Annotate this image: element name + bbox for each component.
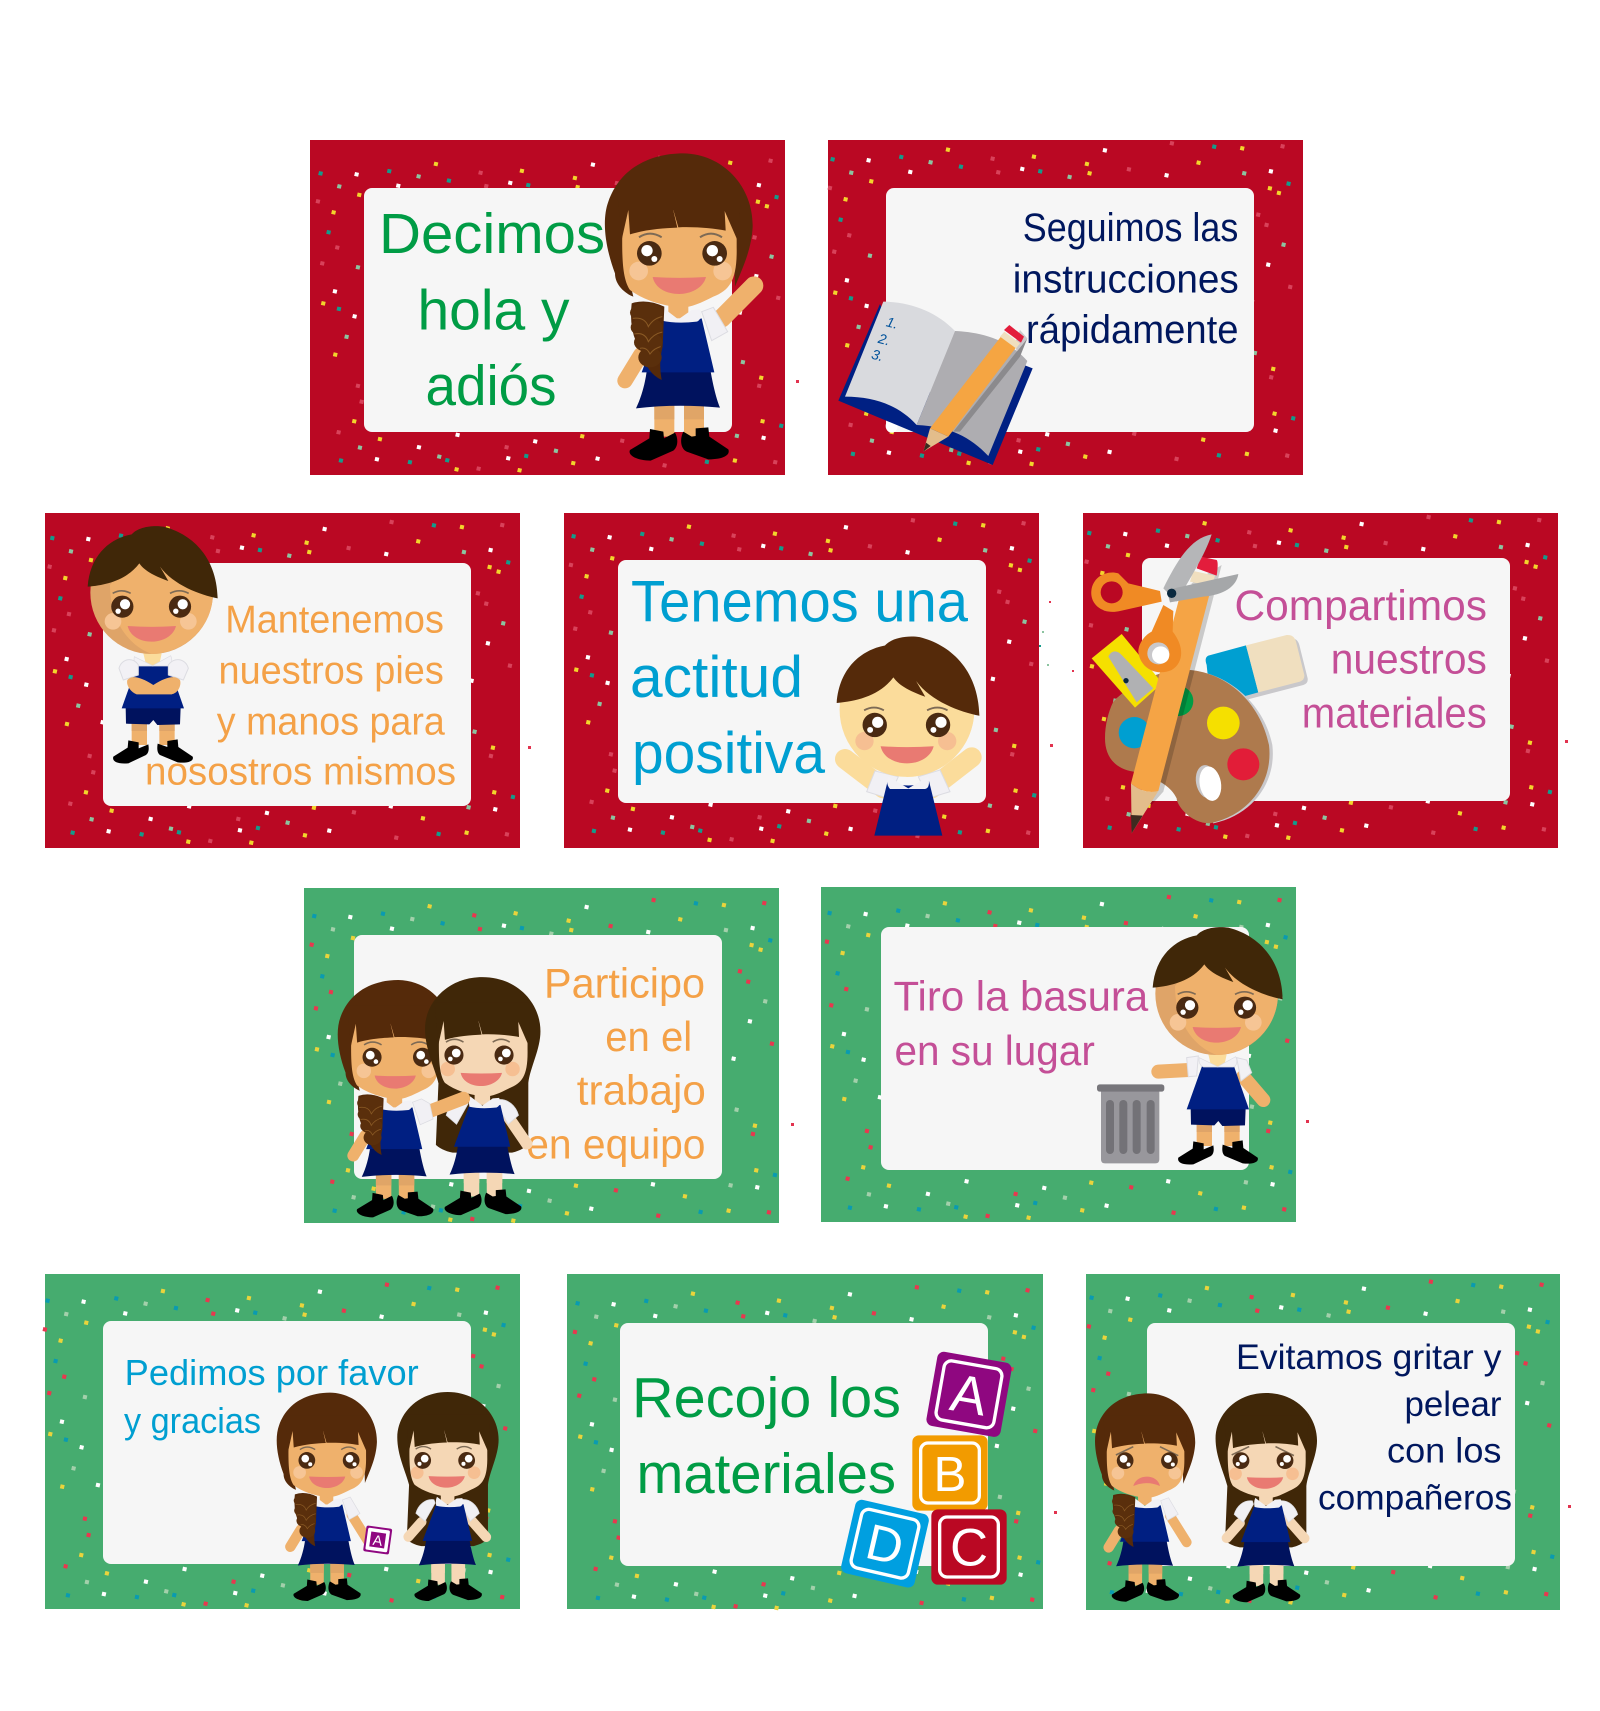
character: boy throwing trash — [1153, 927, 1283, 1165]
text: Tiro la basura en su lugar: en su lugar — [894, 1027, 1095, 1074]
text: Compartimos nuestros materiales: nuestros — [1331, 636, 1487, 684]
character: girl with long hair — [397, 1392, 499, 1601]
icon: paint palette — [1105, 670, 1273, 823]
stray confetti specks — [44, 380, 1571, 1514]
icon: trash can — [1097, 1084, 1164, 1163]
text: Participo en el trabajo en equipo: trabajo — [577, 1066, 706, 1113]
text: Mantenemos nuestros pies y manos para nosostros mismos: nuestros pies — [218, 650, 444, 693]
panel: Pedimos por favor y gracias — [43, 1274, 520, 1609]
panel: Recojo los materiales — [567, 1274, 1043, 1610]
icon: eraser — [1206, 635, 1308, 707]
character: sad girl with braid — [1095, 1393, 1195, 1602]
text: Compartimos nuestros materiales: Compartimos — [1234, 582, 1487, 630]
panel: Decimos hola y adiós — [310, 140, 785, 475]
text: Evitamos gritar y pelear con los compañeros — [1236, 1338, 1512, 1517]
icon: open book and pencil: 2. — [876, 330, 892, 349]
text: Pedimos por favor y gracias: Pedimos por favor — [125, 1352, 419, 1393]
text: Decimos hola y adiós — [379, 202, 605, 418]
icon: open book and pencil: 3. — [870, 346, 885, 364]
panel: Participo en el trabajo en equipo — [304, 888, 779, 1223]
text: Mantenemos nuestros pies y manos para nosostros mismos — [145, 599, 456, 794]
text: Mantenemos nuestros pies y manos para nosostros mismos: Mantenemos — [225, 599, 444, 642]
character: girl waving — [605, 153, 754, 461]
character: arm on shoulder — [412, 1098, 463, 1125]
text: Evitamos gritar y pelear con los compañeros: compañeros — [1318, 1478, 1512, 1517]
character: girl with braid holding block — [277, 1393, 377, 1601]
text: Participo en el trabajo en equipo — [526, 960, 706, 1167]
character: girl with long hair — [425, 977, 540, 1215]
text: Pedimos por favor y gracias — [124, 1352, 419, 1441]
character: worried girl with long hair — [1216, 1393, 1317, 1602]
text: Pedimos por favor y gracias: y gracias — [124, 1400, 261, 1441]
text: Tenemos una actitud positiva: actitud — [630, 645, 803, 710]
icon: block B — [912, 1435, 988, 1511]
text: Recojo los materiales: materiales — [636, 1442, 896, 1506]
text: Tiro la basura en su lugar — [894, 972, 1149, 1074]
text: Mantenemos nuestros pies y manos para nosostros mismos: nosostros mismos — [145, 751, 456, 794]
text: Tenemos una actitud positiva — [630, 570, 969, 786]
panel: Tenemos una actitud positiva — [564, 513, 1039, 848]
icon: block C — [931, 1509, 1007, 1585]
text: Participo en el trabajo en equipo: en el — [605, 1013, 692, 1060]
icon: open book and pencil: 1. — [885, 313, 900, 332]
icon: block D: D — [861, 1513, 909, 1576]
text: Decimos hola y adiós: hola y — [418, 278, 570, 342]
text: Evitamos gritar y pelear con los compañeros: con los — [1387, 1432, 1502, 1471]
text: Tiro la basura en su lugar: Tiro la basura — [894, 972, 1149, 1019]
panel: Compartimos nuestros materiales — [1083, 513, 1558, 848]
text: Decimos hola y adiós: adiós — [426, 354, 556, 418]
icon: small block A: A — [372, 1533, 384, 1550]
text: Compartimos nuestros materiales — [1234, 582, 1487, 738]
text: Recojo los materiales: Recojo los — [632, 1366, 901, 1430]
icon: scissors — [1091, 534, 1238, 672]
panel: Tiro la basura en su lugar — [821, 887, 1296, 1222]
text: Compartimos nuestros materiales: materiales — [1302, 690, 1487, 738]
icon: alphabet blocks — [840, 1351, 1013, 1589]
text: Recojo los materiales — [632, 1366, 901, 1506]
icon: school supplies — [1091, 534, 1308, 833]
icon: block A — [925, 1351, 1013, 1438]
icon: small block A — [363, 1525, 392, 1555]
icon: block A: A — [946, 1363, 992, 1428]
text: Tenemos una actitud positiva: Tenemos una — [631, 570, 969, 634]
text: Mantenemos nuestros pies y manos para nosostros mismos: y manos para — [217, 700, 445, 743]
icon: pencil — [1131, 557, 1222, 833]
text: Seguimos las instrucciones rápidamente — [1013, 206, 1239, 352]
character: boy cheering — [837, 636, 979, 836]
text: Evitamos gritar y pelear con los compañeros: Evitamos gritar y — [1236, 1338, 1502, 1377]
icon: sharpener — [1092, 634, 1158, 708]
text: Participo en el trabajo en equipo: Participo — [544, 960, 705, 1007]
text: Evitamos gritar y pelear con los compañeros: pelear — [1404, 1385, 1502, 1424]
icon: block D — [840, 1498, 930, 1589]
character: boy with crossed arms — [88, 526, 218, 764]
icon: block B: B — [934, 1447, 966, 1502]
panel: Evitamos gritar y pelear — [1086, 1274, 1560, 1610]
text: Tenemos una actitud positiva: positiva — [632, 721, 826, 786]
text: Decimos hola y adiós: Decimos — [379, 202, 605, 266]
text: Seguimos las instrucciones rápidamente: rápidamente — [1026, 308, 1238, 352]
text: Participo en el trabajo en equipo: en equipo — [526, 1120, 706, 1167]
text: Seguimos las instrucciones rápidamente: Seguimos las — [1023, 206, 1238, 250]
text: Seguimos las instrucciones rápidamente: instrucciones — [1013, 257, 1239, 301]
panel: Seguimos las instrucciones — [828, 140, 1303, 475]
icon: block C: C — [950, 1519, 988, 1578]
character: girl with braid — [338, 980, 452, 1217]
panel: Mantenemos nuestros pies y manos — [45, 513, 520, 848]
icon: open book and pencil — [838, 302, 1033, 465]
